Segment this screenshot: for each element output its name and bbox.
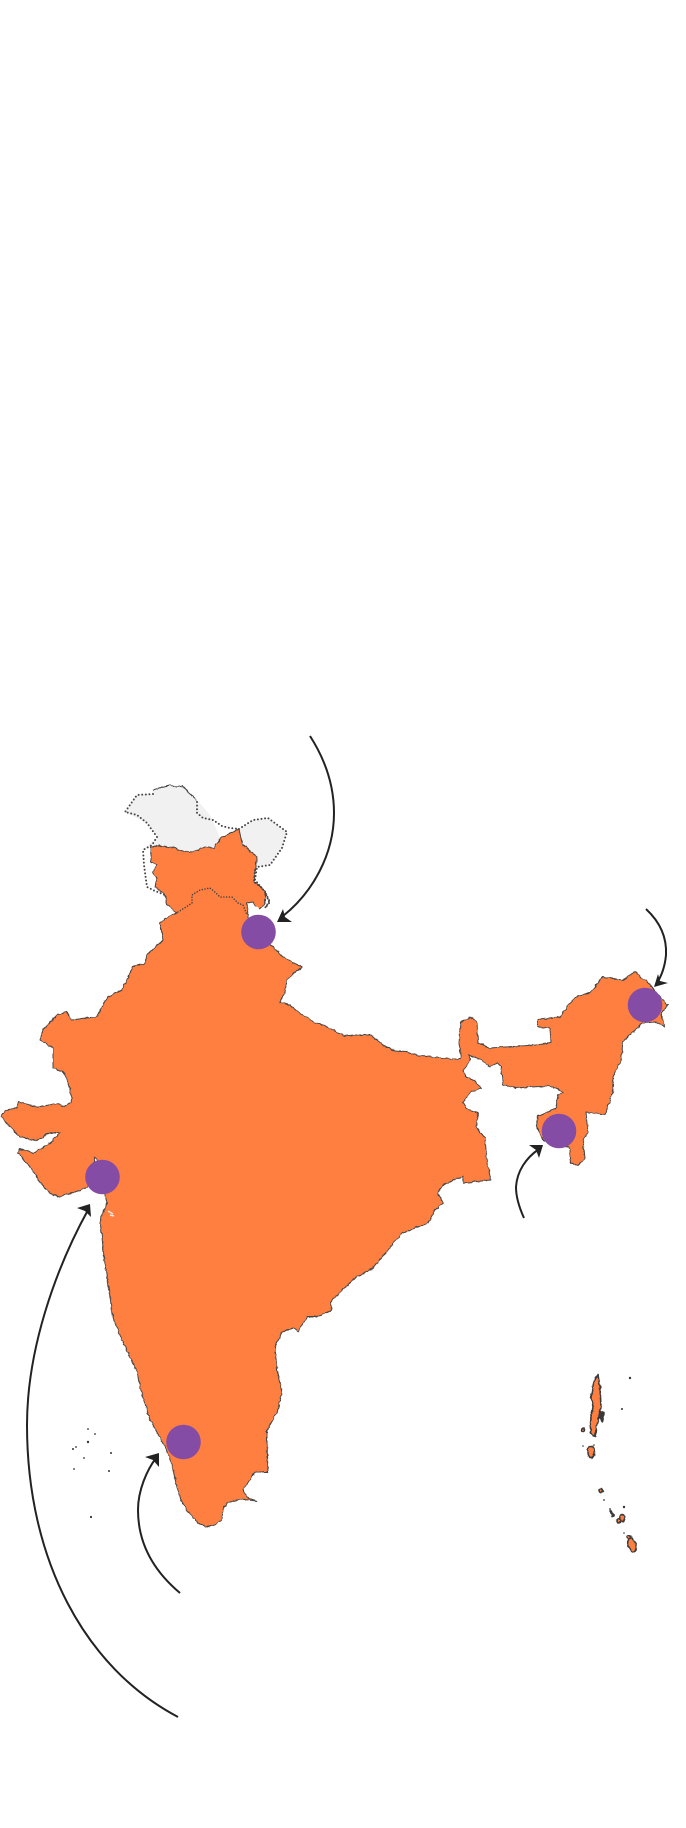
disputed region: Kashmir, grey <box>125 785 220 852</box>
location marker: north-east <box>628 988 662 1022</box>
solid border of northern Kashmir <box>153 785 197 800</box>
small outlying islands <box>582 1377 631 1534</box>
location marker: north <box>241 915 276 949</box>
internal dotted border over orange <box>178 888 247 915</box>
location marker: west <box>85 1160 120 1194</box>
arrow: to north-east marker <box>646 909 668 987</box>
dotted border around disputed regions <box>125 794 287 908</box>
Lakshadweep islands <box>72 1428 112 1518</box>
location marker: east <box>542 1114 576 1148</box>
white notch north of Himachal <box>249 905 262 916</box>
disputed region: Aksai Chin, grey <box>239 818 287 867</box>
India mainland, orange <box>1 829 668 1527</box>
arrow: to east marker <box>516 1145 543 1218</box>
location marker: south <box>166 1425 201 1459</box>
arrow: to north marker <box>277 736 334 922</box>
map of India <box>1 785 668 1553</box>
Andaman and Nicobar islands <box>582 1375 638 1553</box>
dotted border along Aksai Chin edge <box>254 870 269 908</box>
arrow: to south marker <box>138 1453 180 1593</box>
white marks on western coast <box>108 1211 114 1216</box>
arrow: to west marker <box>27 1204 178 1717</box>
